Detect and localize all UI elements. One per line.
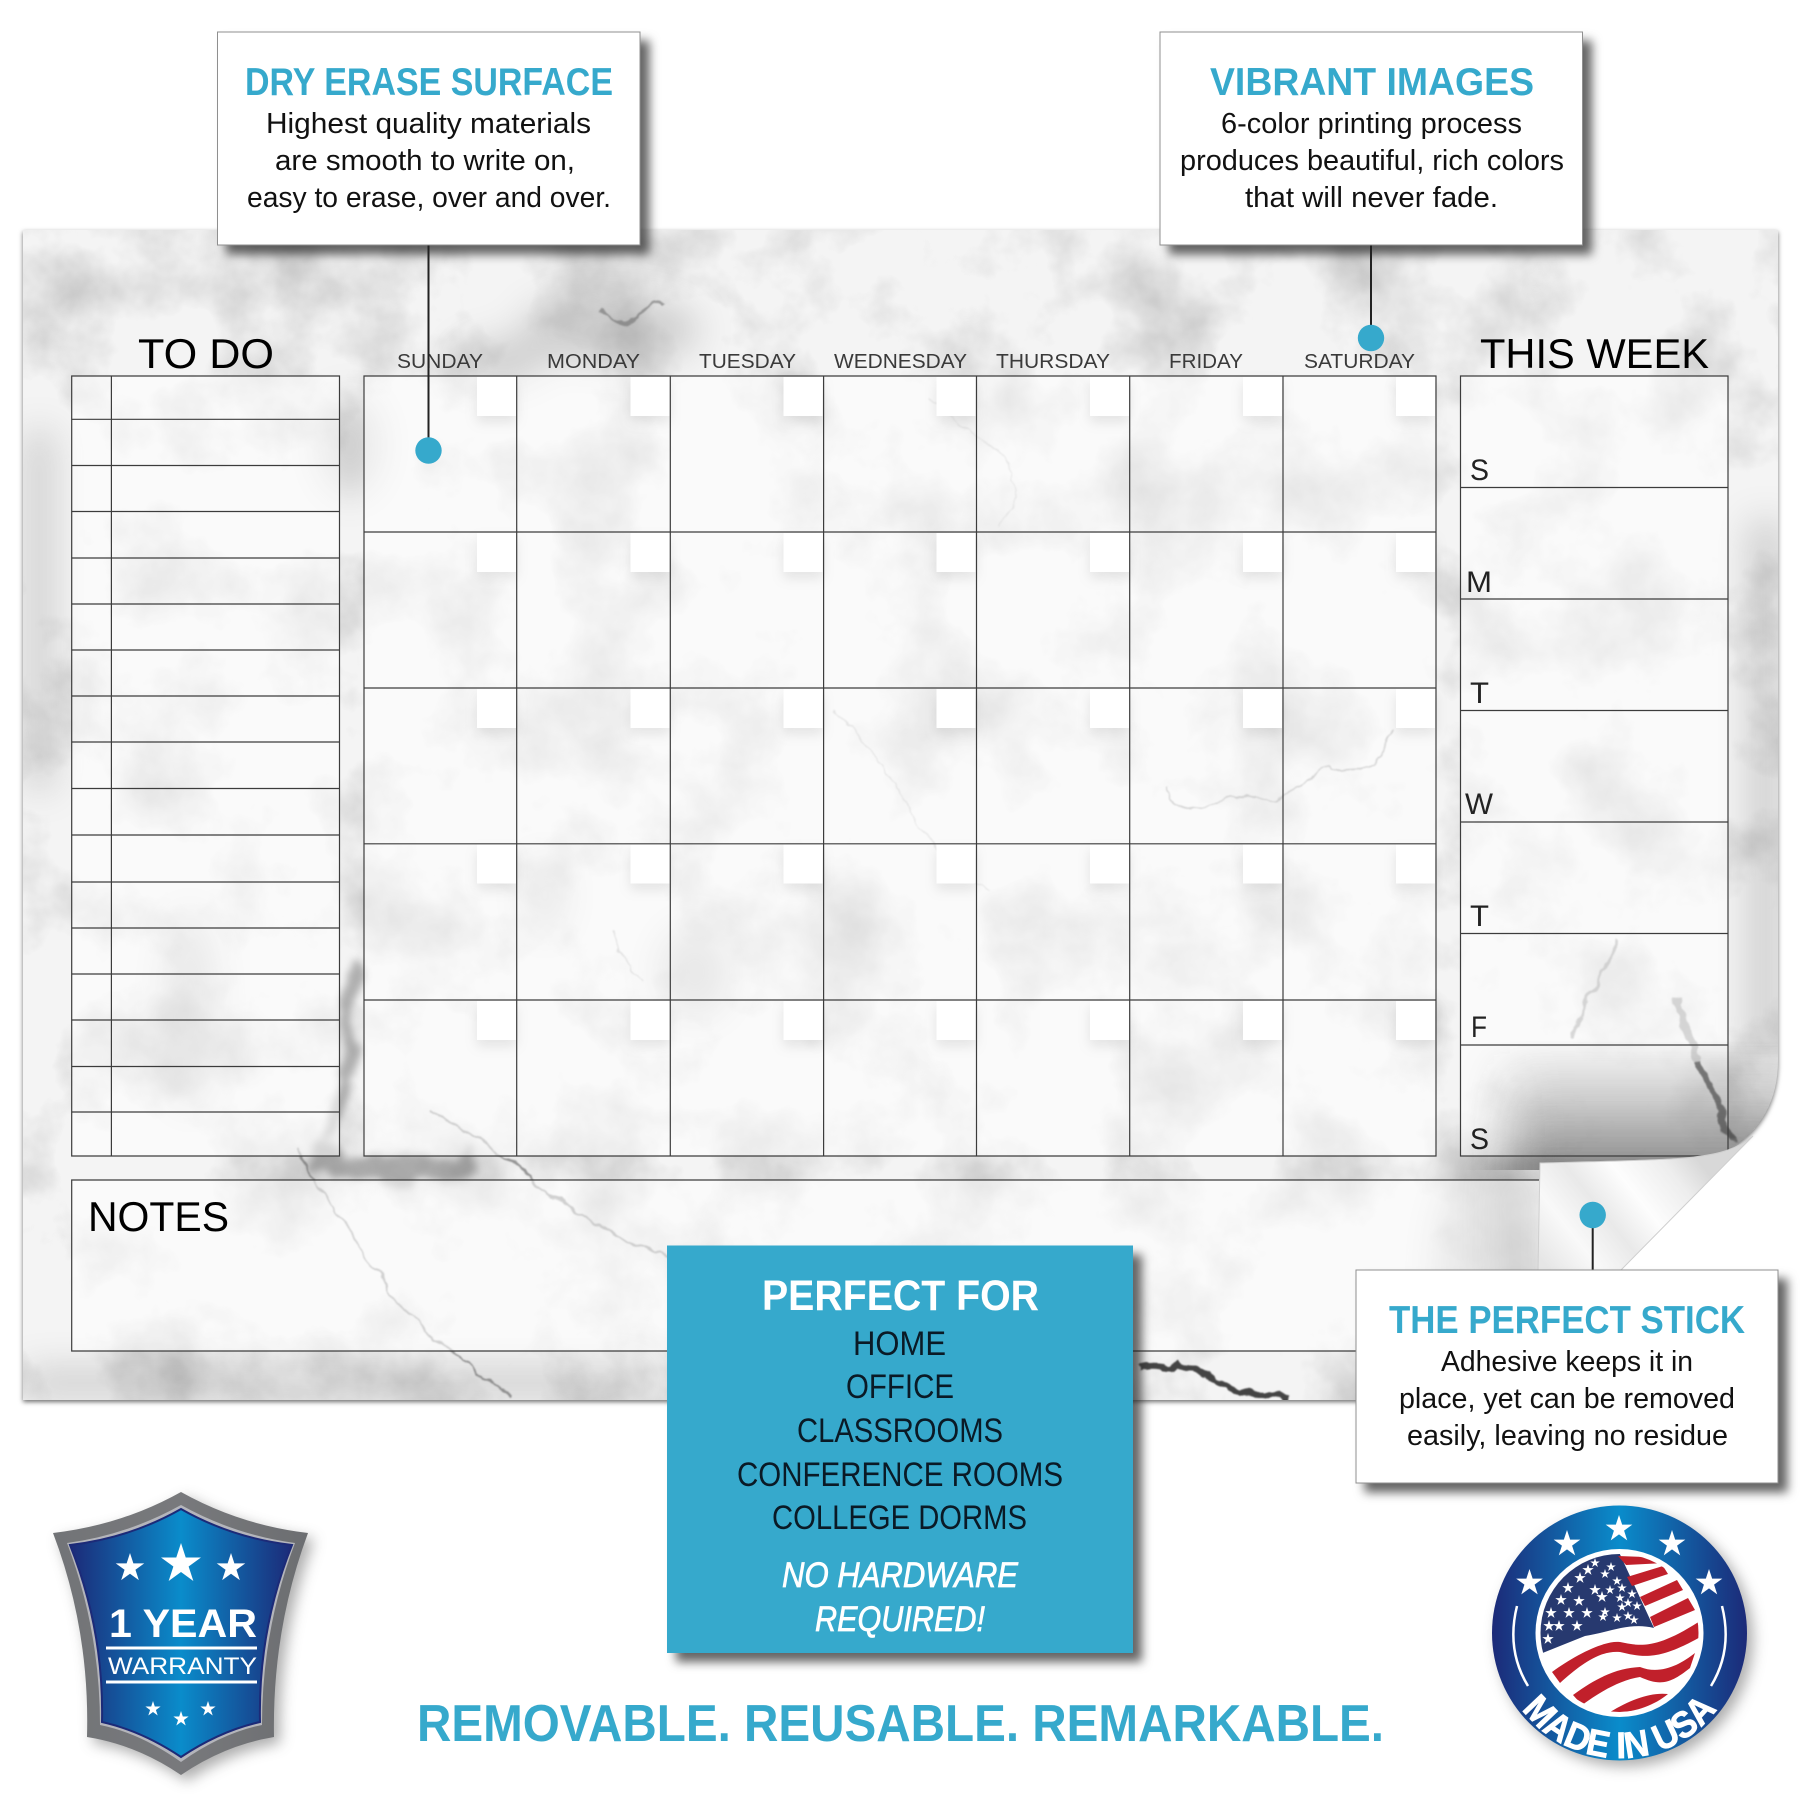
date squares — [477, 377, 1435, 1040]
badge arcs — [1513, 1606, 1726, 1686]
panel: this week grid: S — [1470, 1123, 1489, 1156]
callout: dry erase surface: are smooth to write on, — [275, 145, 575, 177]
tagline: REMOVABLE. REUSABLE. REMARKABLE. — [417, 1695, 1384, 1753]
panel: to do list grid — [72, 376, 339, 1156]
weekday headings: WEDNESDAY — [834, 351, 967, 373]
panel: perfect for: NO HARDWARE — [782, 1556, 1019, 1595]
marble calendar sheet — [23, 230, 1800, 1405]
weekday headings: THURSDAY — [996, 351, 1110, 373]
callout: dry erase surface: easy to erase, over and over. — [247, 182, 611, 214]
panel: perfect for — [667, 1246, 1133, 1653]
sheet base — [23, 230, 1778, 1400]
flag — [1535, 1550, 1702, 1712]
callout: the perfect stick: place, yet can be removed — [1399, 1383, 1735, 1415]
flag stars — [1542, 1558, 1642, 1644]
weekday headings: SUNDAY — [397, 351, 483, 373]
weekday headings: TUESDAY — [699, 351, 796, 373]
panel: notes — [72, 1180, 1539, 1351]
callout: the perfect stick: THE PERFECT STICK — [1389, 1299, 1745, 1342]
weekday headings: SATURDAY — [1304, 351, 1415, 373]
callout: vibrant images: produces beautiful, rich colors — [1180, 145, 1564, 177]
panel: perfect for: HOME — [853, 1325, 946, 1363]
icon: warranty shield: 1 YEAR — [109, 1602, 257, 1646]
panel: notes: NOTES — [88, 1193, 229, 1240]
weekday headings — [397, 351, 1415, 373]
panel: this week grid: T — [1470, 900, 1489, 933]
callout: vibrant images: 6-color printing process — [1221, 108, 1522, 140]
panel: this week grid: F — [1471, 1011, 1487, 1044]
badge stars — [1516, 1515, 1722, 1594]
callout: the perfect stick: easily, leaving no residue — [1407, 1420, 1728, 1452]
callout: dry erase surface: Highest quality materials — [266, 108, 591, 140]
callout: vibrant images: VIBRANT IMAGES — [1210, 61, 1534, 104]
panel: this week grid: M — [1466, 566, 1492, 599]
panel: perfect for: COLLEGE DORMS — [772, 1499, 1027, 1537]
panel: this week grid: T — [1470, 677, 1489, 710]
heading: to do: TO DO — [138, 330, 274, 377]
weekday headings: MONDAY — [547, 351, 640, 373]
panel: perfect for: CONFERENCE ROOMS — [737, 1456, 1063, 1494]
panel: this week grid — [1460, 376, 1728, 1156]
callout line: dry erase — [415, 245, 442, 464]
panel: this week grid: W — [1465, 788, 1494, 821]
callout: vibrant images — [1160, 32, 1582, 245]
dark curl shading — [1510, 1040, 1800, 1170]
heading: this week: THIS WEEK — [1480, 330, 1709, 377]
shield stars — [116, 1543, 245, 1725]
peeled corner — [1538, 1136, 1753, 1270]
icon: warranty shield — [53, 1492, 308, 1775]
panel: perfect for: CLASSROOMS — [797, 1412, 1003, 1450]
panel: perfect for: OFFICE — [846, 1368, 954, 1406]
callout: vibrant images: that will never fade. — [1245, 182, 1498, 214]
callout line: perfect stick — [1580, 1202, 1606, 1272]
callout: dry erase surface: DRY ERASE SURFACE — [245, 61, 613, 104]
panel: calendar grid — [364, 376, 1436, 1156]
icon: warranty shield: WARRANTY — [108, 1653, 257, 1680]
icon: made in usa badge — [1490, 1504, 1762, 1775]
marble texture and veins — [23, 230, 1800, 1405]
callout: dry erase surface — [218, 32, 640, 245]
callout: the perfect stick — [1356, 1270, 1778, 1483]
callout: the perfect stick: Adhesive keeps it in — [1441, 1346, 1693, 1378]
weekday headings: FRIDAY — [1169, 351, 1243, 373]
callout line: vibrant images — [1358, 245, 1384, 351]
badge label: MADE IN USA — [1522, 1693, 1718, 1759]
mottled grey vein band — [315, 960, 480, 1170]
dark vein at bottom — [1141, 1362, 1288, 1400]
whitened panel interiors — [72, 376, 1728, 1351]
panel: perfect for: PERFECT FOR — [762, 1272, 1039, 1320]
panel: this week grid: S — [1470, 454, 1489, 487]
shadow beside curl — [1480, 1157, 1540, 1270]
panel: perfect for: REQUIRED! — [815, 1600, 985, 1639]
